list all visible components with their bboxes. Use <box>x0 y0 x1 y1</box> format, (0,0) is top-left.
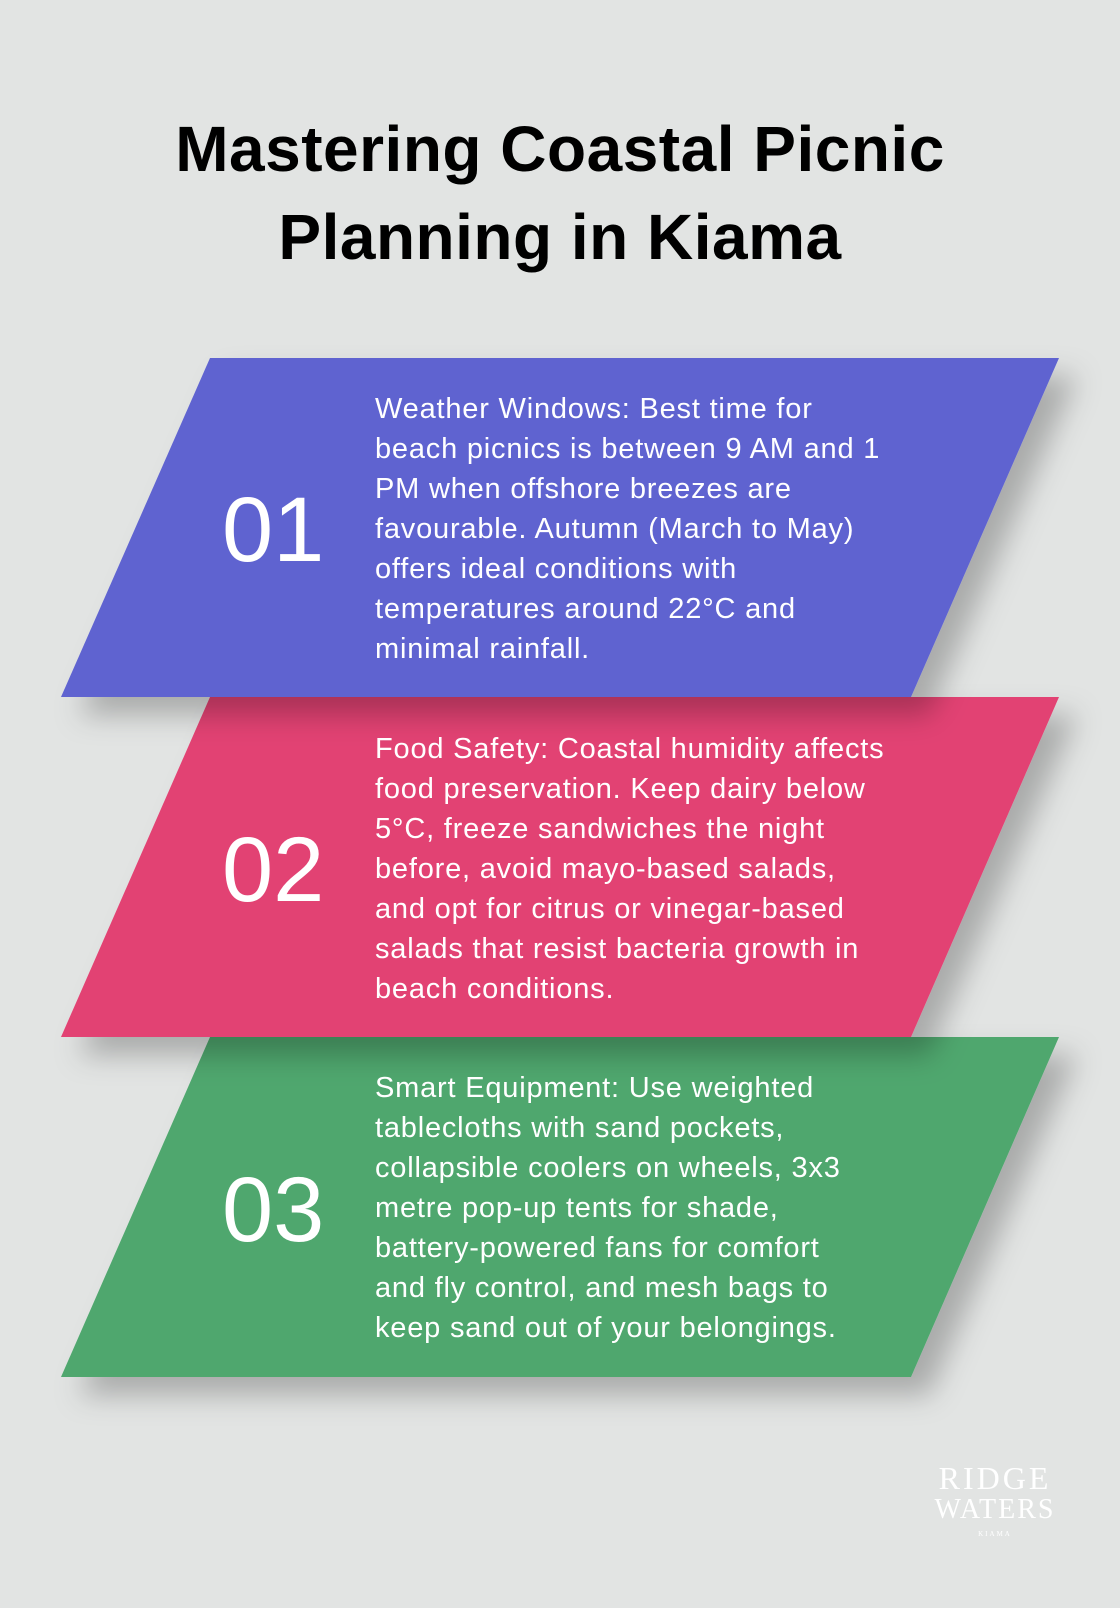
text 03: and fly control, and mesh bags to <box>375 1272 829 1304</box>
panel 3 shape <box>61 1037 1059 1377</box>
text 01: favourable. Autumn (March to May) <box>375 513 854 545</box>
text 01: Weather Windows: Best time for <box>375 393 813 425</box>
number 01: 01 <box>222 479 324 581</box>
text 03: metre pop-up tents for shade, <box>375 1192 779 1224</box>
logo: RIDGE <box>939 1460 1051 1496</box>
title: Mastering Coastal Picnic <box>175 113 945 185</box>
panel 2 shape <box>61 697 1059 1037</box>
text 03: battery-powered fans for comfort <box>375 1232 820 1264</box>
text 01: offers ideal conditions with <box>375 553 737 585</box>
text 02: and opt for citrus or vinegar-based <box>375 893 845 925</box>
text 01: minimal rainfall. <box>375 633 590 665</box>
text 02: food preservation. Keep dairy below <box>375 773 866 805</box>
logo <box>934 1460 1055 1538</box>
panel 1: weather windows <box>222 393 880 665</box>
text 01 <box>375 393 880 665</box>
panel 2: food safety <box>222 733 884 1005</box>
text 02 <box>375 733 884 1005</box>
text 02: Food Safety: Coastal humidity affects <box>375 733 884 765</box>
number 02: 02 <box>222 819 324 921</box>
text 01: beach picnics is between 9 AM and 1 <box>375 433 880 465</box>
logo: WATERS <box>935 1494 1055 1525</box>
text 02: beach conditions. <box>375 973 614 1005</box>
title <box>175 113 945 273</box>
text 03: keep sand out of your belongings. <box>375 1312 837 1344</box>
text 03: collapsible coolers on wheels, 3x3 <box>375 1152 841 1184</box>
text 02: 5°C, freeze sandwiches the night <box>375 813 825 845</box>
text 02: salads that resist bacteria growth in <box>375 933 859 965</box>
text 01: temperatures around 22°C and <box>375 593 796 625</box>
number 03: 03 <box>222 1159 324 1261</box>
text 01: PM when offshore breezes are <box>375 473 792 505</box>
text 03: tablecloths with sand pockets, <box>375 1112 784 1144</box>
title: Planning in Kiama <box>278 201 842 273</box>
logo: KIAMA <box>978 1530 1012 1538</box>
panel 1 shape <box>61 358 1059 697</box>
text 03: Smart Equipment: Use weighted <box>375 1072 814 1104</box>
text 03 <box>375 1072 841 1344</box>
panel 3: smart equipment <box>222 1072 841 1344</box>
text 02: before, avoid mayo-based salads, <box>375 853 836 885</box>
